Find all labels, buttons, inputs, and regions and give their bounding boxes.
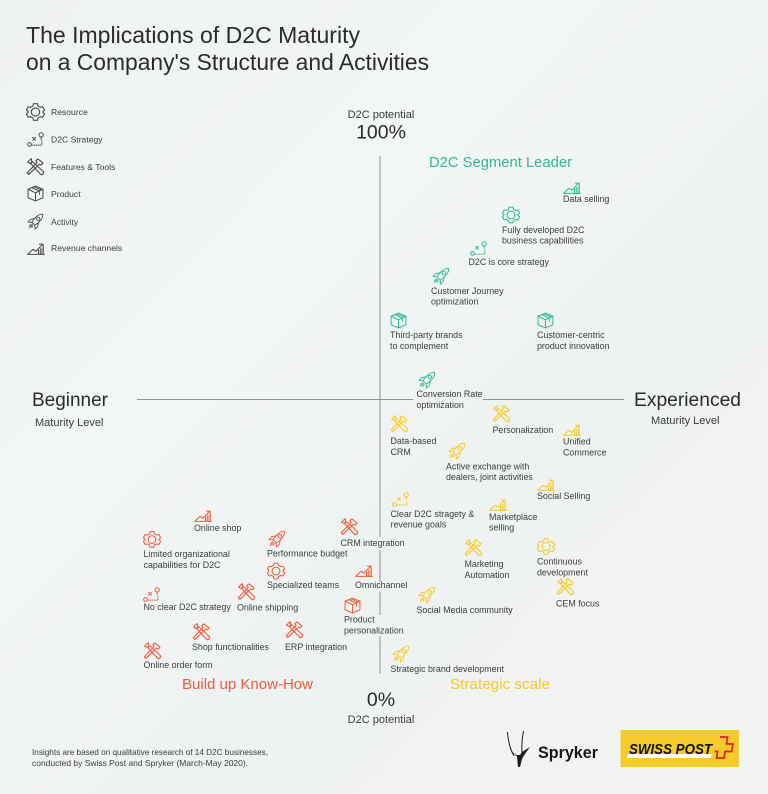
item: Social Selling: Social Selling bbox=[537, 491, 590, 501]
item: Data selling: Data selling bbox=[563, 194, 609, 204]
item: Fully developed: business capabilities bbox=[502, 236, 584, 246]
icon: swiss cross bbox=[714, 737, 733, 758]
legend: resource bbox=[26, 104, 88, 120]
item: Active exchange bbox=[446, 440, 533, 482]
axis label: beginner: Maturity Level bbox=[35, 417, 103, 429]
item: Data-based CRM bbox=[390, 416, 436, 457]
legend: D2C strategy: D2C Strategy bbox=[51, 134, 103, 144]
panel: green quadrant items bbox=[390, 183, 610, 410]
quadrant heading: Build up Know-How: Build up Know-How bbox=[182, 676, 313, 693]
item: Third-party brands: to complement bbox=[390, 341, 449, 351]
axis label: experienced bbox=[634, 389, 741, 427]
legend: product bbox=[28, 186, 81, 201]
item: Clear D2C strategy: revenue goals bbox=[390, 520, 447, 530]
item: Personalization: Personalization bbox=[492, 425, 553, 435]
item: Performance budget: Performance budget bbox=[267, 548, 348, 558]
item: Clear D2C strategy bbox=[390, 493, 474, 530]
axis label: bottom bbox=[348, 689, 414, 726]
item: Conversion Rate bbox=[416, 369, 483, 410]
item: Clear D2C strategy: Clear D2C stragety & bbox=[390, 509, 474, 519]
item: Specialized teams: Specialized teams bbox=[267, 580, 340, 590]
item: Conversion Rate: Conversion Rate bbox=[416, 389, 483, 399]
item: Personalization bbox=[492, 406, 553, 435]
legend bbox=[26, 104, 122, 254]
item: Strategic brand development bbox=[390, 643, 505, 674]
item: Data selling bbox=[563, 183, 609, 204]
footnote: Insights are based on qualitative research of 14 D2C businesses, bbox=[32, 747, 268, 757]
item: Customer Journey: optimization bbox=[431, 296, 478, 306]
item: Active exchange: Active exchange with bbox=[446, 462, 529, 472]
item: CRM integration bbox=[340, 519, 405, 548]
item: CEM focus bbox=[556, 579, 600, 608]
item: Conversion Rate: optimization bbox=[416, 400, 464, 410]
axis label: top: D2C potential bbox=[348, 109, 414, 121]
item: Performance budget bbox=[267, 528, 348, 558]
item: Product personalization bbox=[344, 598, 404, 636]
legend: D2C strategy bbox=[28, 133, 103, 146]
logo: Swiss Post bbox=[620, 730, 739, 767]
item: Omnichannel: Omnichannel bbox=[355, 580, 407, 590]
item: Limited capabilities: capabilities for D2C bbox=[144, 560, 221, 570]
legend: activity bbox=[26, 211, 79, 231]
icon: antelope head bbox=[508, 731, 530, 767]
item: Marketing Automation: Automation bbox=[464, 570, 509, 580]
item: Customer-centric bbox=[537, 313, 610, 351]
item: Omnichannel bbox=[355, 566, 407, 590]
item: Social Media community bbox=[416, 584, 513, 615]
quadrant heading: D2C Segment Leader: D2C Segment Leader bbox=[429, 154, 572, 171]
item: Online shipping bbox=[237, 584, 298, 612]
item: Shop functionalities bbox=[192, 624, 270, 652]
item: Unified Commerce: Unified bbox=[563, 436, 591, 446]
item: Online order form bbox=[144, 643, 213, 670]
item: Marketplace selling: Marketplace bbox=[489, 512, 537, 522]
item: Data-based CRM: CRM bbox=[390, 447, 411, 457]
axis label: top bbox=[348, 109, 414, 144]
item: Product personalization: personalization bbox=[344, 626, 404, 636]
item: Continuous development: development bbox=[537, 568, 588, 578]
title: on a Company's Structure and Activities bbox=[26, 49, 429, 75]
item: Marketplace selling: selling bbox=[489, 522, 514, 532]
logo: Spryker: Spryker bbox=[538, 744, 599, 762]
item: Marketing Automation: Marketing bbox=[464, 559, 504, 569]
item: No clear D2C strategy: No clear D2C strategy bbox=[144, 602, 231, 612]
title: The Implications of D2C Maturity bbox=[26, 22, 360, 48]
item: Online order form: Online order form bbox=[144, 660, 213, 670]
panel: orange quadrant items bbox=[143, 511, 407, 670]
axes bbox=[137, 156, 624, 674]
item: Fully developed bbox=[502, 207, 585, 246]
item: Social Media community: Social Media community bbox=[416, 605, 513, 615]
footnote: conducted by Swiss Post and Spryker (March-May 2020). bbox=[32, 758, 248, 768]
item: Marketplace selling bbox=[489, 500, 537, 532]
axis label: experienced: Experienced bbox=[634, 389, 741, 411]
footnote bbox=[32, 747, 268, 768]
quadrant heading: Strategic scale: Strategic scale bbox=[450, 676, 550, 693]
item: Unified Commerce bbox=[563, 425, 606, 458]
item: Continuous development bbox=[537, 539, 588, 578]
item: Active exchange: dealers, joint activities bbox=[446, 472, 533, 482]
item: Limited capabilities: Limited organizational bbox=[144, 549, 230, 559]
axis label: top: 100% bbox=[356, 122, 406, 144]
axis label: beginner: Beginner bbox=[32, 389, 108, 411]
panel: yellow quadrant items bbox=[390, 406, 606, 674]
item: ERP integration: ERP integration bbox=[285, 642, 347, 652]
item: CEM focus: CEM focus bbox=[556, 598, 600, 608]
item: Social Selling bbox=[537, 480, 590, 501]
item: Shop functionalities: Shop functionalities bbox=[192, 642, 270, 652]
logo: Swiss Post: SWISS POST bbox=[629, 741, 714, 758]
item: Online shipping: Online shipping bbox=[237, 602, 298, 612]
item: Product personalization: Product bbox=[344, 614, 375, 624]
item: Third-party brands bbox=[390, 313, 463, 351]
item: Customer Journey: Customer Journey bbox=[431, 286, 504, 296]
legend: features and tools bbox=[27, 159, 115, 175]
item: Data-based CRM: Data-based bbox=[390, 436, 436, 446]
item: Customer-centric: product innovation bbox=[537, 341, 610, 351]
logo: Spryker bbox=[508, 731, 599, 767]
item: Third-party brands: Third-party brands bbox=[390, 330, 463, 340]
item: Online shop bbox=[194, 511, 241, 533]
legend: revenue channels: Revenue channels bbox=[51, 243, 122, 253]
legend: features and tools: Features & Tools bbox=[51, 162, 115, 172]
item: Strategic brand development: Strategic brand development bbox=[390, 664, 505, 674]
legend: resource: Resource bbox=[51, 107, 88, 117]
item: Unified Commerce: Commerce bbox=[563, 448, 606, 458]
item: Customer-centric: Customer-centric bbox=[537, 330, 605, 340]
axis label: bottom: D2C potential bbox=[348, 714, 414, 726]
title bbox=[26, 22, 429, 75]
legend: product: Product bbox=[51, 189, 81, 199]
item: D2C is core strategy bbox=[468, 242, 549, 267]
item: Limited capabilities bbox=[143, 532, 230, 570]
item: CRM integration: CRM integration bbox=[340, 538, 405, 548]
item: ERP integration bbox=[285, 622, 347, 652]
item: D2C is core strategy: D2C is core strategy bbox=[468, 257, 549, 267]
item: No clear D2C strategy bbox=[144, 588, 231, 612]
item: Specialized teams bbox=[267, 563, 340, 590]
item: Marketing Automation bbox=[464, 540, 509, 580]
item: Customer Journey bbox=[431, 265, 504, 306]
item: Online shop: Online shop bbox=[194, 523, 241, 533]
legend: activity: Activity bbox=[51, 217, 79, 227]
legend: revenue channels bbox=[28, 243, 122, 254]
item: Continuous development: Continuous bbox=[537, 556, 582, 566]
axis label: bottom: 0% bbox=[367, 689, 395, 711]
item: Fully developed: Fully developed D2C bbox=[502, 225, 585, 235]
axis label: experienced: Maturity Level bbox=[651, 415, 719, 427]
axis label: beginner bbox=[32, 389, 108, 429]
